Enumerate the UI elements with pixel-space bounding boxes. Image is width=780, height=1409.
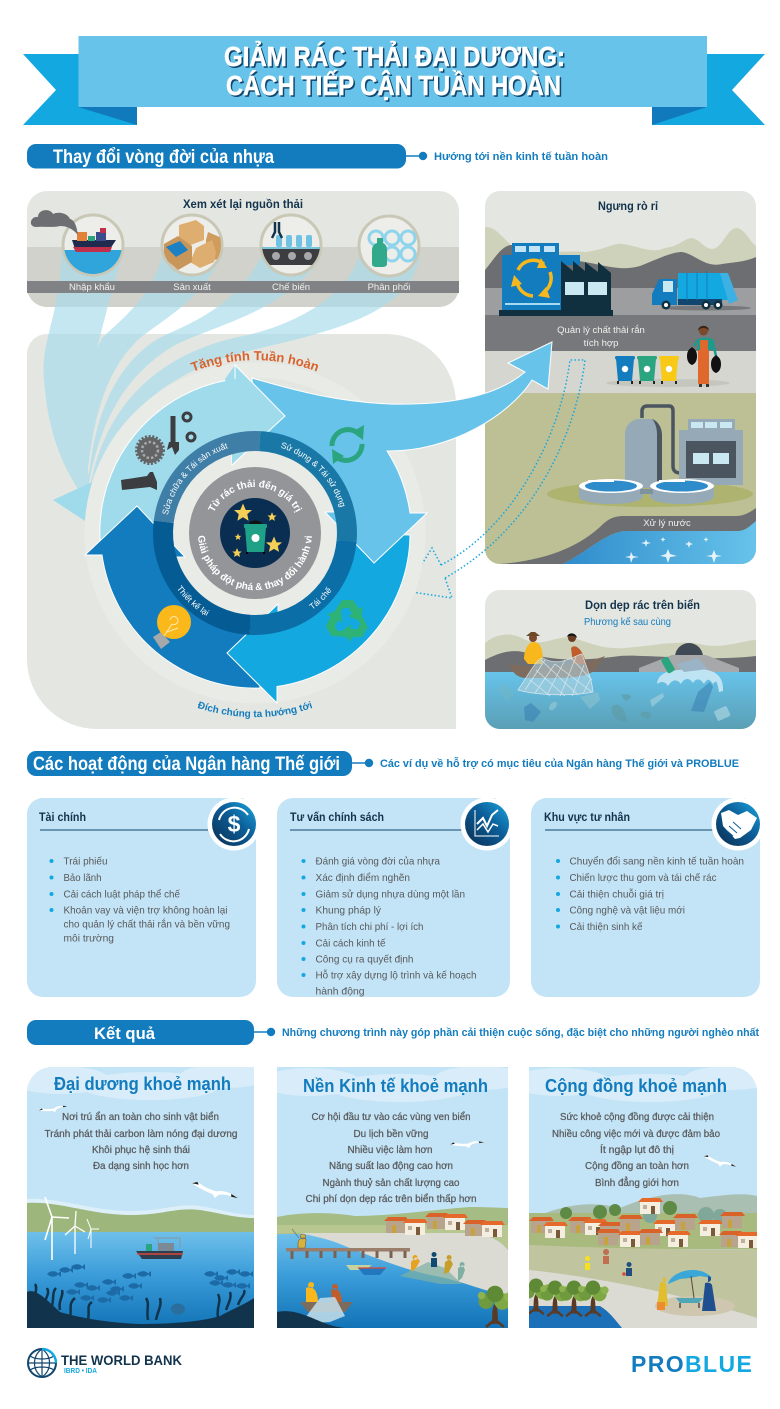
panel: healthy ocean (27, 1067, 254, 1328)
list: policy advice: Hỗ trợ xây dựng lộ trình và kế hoạch (316, 968, 477, 982)
panel: stop leakage (485, 191, 756, 564)
panel: rethink sources background (27, 191, 459, 307)
World Bank logo (28, 1349, 182, 1377)
woman holding trash bags (687, 326, 721, 387)
section header: World Bank activities (27, 751, 739, 776)
logo globe (28, 1349, 56, 1377)
list: finance: môi trường (64, 932, 114, 944)
text: healthy ocean: Khôi phục hệ sinh thái (92, 1144, 190, 1156)
green hill (529, 1213, 757, 1249)
road (529, 1270, 757, 1328)
factory arrow heads (511, 258, 550, 298)
ring label: repair: Sửa chữa & Tái sản xuất (162, 442, 228, 514)
small boats (346, 1265, 386, 1275)
pier (286, 1248, 410, 1259)
list: private sector: Công nghệ và vật liệu mới (570, 904, 685, 916)
beach (300, 1233, 508, 1296)
text: healthy community: Bình đẳng giới hơn (595, 1176, 679, 1189)
village trees (560, 1201, 727, 1223)
icon: chart (460, 796, 514, 850)
section header: plastic life cycle (27, 144, 608, 168)
panel: circularity background (27, 334, 456, 729)
icon: handshake (712, 796, 764, 850)
dotted return arrow (405, 360, 585, 598)
fish school (47, 1264, 253, 1303)
section header: plastic life cycle: Thay đổi vòng đời của nhựa (53, 147, 274, 168)
sea (27, 1232, 254, 1328)
ring segment bottom right (250, 541, 347, 625)
heading: ocean cleanup: Dọn dẹp rác trên biển (585, 600, 700, 612)
light hills (485, 227, 756, 270)
section header: results (27, 1020, 759, 1045)
arrow: recycle (227, 533, 410, 703)
mangrove trees (521, 1278, 609, 1316)
source label: distribution: Phân phối (368, 282, 410, 293)
fishers boat with net (300, 1282, 353, 1323)
section header: results: Kết quả (94, 1024, 156, 1043)
icon: conveyor bottling (260, 215, 322, 275)
list: finance: Cải cách luật pháp thể chế (64, 888, 180, 900)
list: policy advice: Giảm sử dụng nhựa dùng một lần (316, 888, 465, 900)
list: finance: Bảo lãnh (64, 872, 102, 884)
section header: results: Những chương trình này góp phần cải thiện cuộc sống, đặc biệt cho những người nghèo nhất (282, 1027, 759, 1039)
list: finance (50, 856, 230, 944)
gray centre ring (189, 467, 321, 599)
banner left fold (78, 107, 137, 125)
text: healthy economy: Ngành thuỷ sản chất lượng cao (322, 1177, 460, 1189)
playing children (585, 1249, 632, 1276)
field (529, 1245, 757, 1318)
heading rule (40, 829, 208, 831)
road curve with water treatment label (500, 508, 756, 564)
ring segment top right (260, 441, 347, 541)
splash and trash at outfall (657, 656, 723, 692)
seagull (192, 1182, 238, 1198)
label: increasing circularity: Tăng tính Tuần hoàn (190, 350, 318, 372)
heading: stop leakage: Ngưng rò rỉ (598, 201, 658, 213)
list: private sector: Chiến lược thu gom và tái chế rác (570, 872, 716, 884)
fishing boat (136, 1238, 183, 1259)
heading: rethink sources: Xem xét lại nguồn thải (183, 199, 303, 211)
ship smoke (31, 210, 78, 235)
banner main (78, 36, 707, 107)
sea (485, 672, 756, 729)
seagull (704, 1155, 736, 1167)
icon: cargo ship (31, 210, 126, 280)
list: finance: cho quản lý chất thải rắn và bền vững (64, 918, 230, 930)
beach net (400, 1262, 462, 1284)
panel: private sector (531, 796, 764, 997)
heading rule (290, 829, 462, 831)
garbage truck (652, 271, 751, 310)
cleanup hills light (485, 634, 756, 660)
text: healthy ocean: Đa dạng sinh học hơn (93, 1160, 189, 1172)
factory (499, 243, 613, 316)
heading: policy advice: Tư vấn chính sách (290, 810, 384, 824)
list: finance: Trái phiếu (64, 856, 108, 868)
list: finance: Khoản vay và viện trợ không hoàn lại (64, 904, 228, 916)
banner right ribbon tail (705, 54, 765, 125)
PROBLUE logo: PROBLUE (631, 1351, 753, 1377)
net (518, 654, 593, 696)
fishing boat (510, 656, 605, 678)
marine litter (498, 682, 731, 722)
turtle (171, 1304, 185, 1314)
text: healthy economy: Năng suất lao động cao hơn (329, 1160, 453, 1172)
text: healthy economy (306, 1111, 477, 1205)
arrow head edge (232, 365, 285, 465)
icon: cardboard boxes (162, 215, 222, 275)
woman in blue (702, 1276, 716, 1311)
list: private sector: Cải thiện chuỗi giá trị (570, 888, 664, 900)
icon: plastic bottle and rings (359, 216, 419, 276)
flows from source to cycle (44, 250, 420, 495)
icon: green bin (244, 521, 267, 554)
list: policy advice: Phân tích chi phí - lợi ích (316, 921, 424, 933)
water treatment label: Xử lý nước (643, 518, 691, 529)
heading: healthy community: Cộng đồng khoẻ mạnh (545, 1076, 727, 1096)
icon: tools (121, 413, 195, 490)
centre label bottom: Giải pháp đột phá & thay đổi hành vi (198, 536, 312, 590)
source label: production: Sản xuất (173, 282, 211, 293)
text: healthy economy: Cơ hội đầu tư vào các vùng ven biển (312, 1111, 471, 1123)
ring segment top left (164, 441, 260, 522)
list: private sector: Chuyển đổi sang nền kinh tế tuần hoàn (570, 856, 744, 868)
text: healthy ocean (44, 1111, 238, 1172)
text: healthy community: Nhiều công việc mới và được đảm bảo (552, 1128, 720, 1140)
pale band (485, 351, 756, 393)
seagull (450, 1132, 484, 1154)
water and mangroves (529, 1306, 622, 1328)
label: where we are heading: Đích chúng ta hướng tới (198, 701, 312, 719)
arrow: use and reuse with outflow (252, 342, 552, 563)
text: healthy ocean: Nơi trú ẩn an toàn cho sinh vật biển (62, 1111, 219, 1123)
ring label: reuse: Sử dụng & Tái sử dụng (281, 442, 344, 508)
text: healthy ocean: Tránh phát thải carbon làm nóng đại dương (44, 1128, 238, 1140)
outer halo (92, 370, 418, 696)
source label: import: Nhập khẩu (69, 282, 115, 293)
list: private sector: Cải thiện sinh kế (570, 921, 643, 933)
text: healthy economy: Du lịch bền vững (354, 1128, 429, 1140)
hill highlight (27, 1199, 254, 1240)
green hill (27, 1203, 254, 1240)
list: policy advice: Xác định điểm nghẽn (316, 872, 410, 884)
list: policy advice: hành động (316, 986, 365, 998)
title shadow line 1: GIẢM RÁC THẢI ĐẠI DƯƠNG: (226, 42, 566, 74)
logo tagline: IBRD • IDA (64, 1368, 97, 1375)
green land (485, 393, 756, 564)
banner right fold (652, 107, 707, 125)
heading rule (545, 829, 714, 831)
text: healthy economy: Chi phí dọn dẹp rác trên biển thấp hơn (306, 1193, 477, 1205)
icon: currency exchange: $ (228, 811, 241, 837)
seaweed (35, 1284, 244, 1320)
list: policy advice: Khung pháp lý (316, 904, 382, 916)
sea (277, 1234, 508, 1328)
navy centre (220, 498, 290, 568)
arrow head: repair overlay (225, 365, 285, 465)
source label: processing: Chế biến (272, 282, 310, 293)
dark hills (485, 245, 756, 288)
village (529, 1198, 761, 1248)
concrete outfall (639, 643, 739, 672)
section header: World Bank activities: Các hoạt động của Ngân hàng Thế giới (33, 754, 340, 775)
title line 1: GIẢM RÁC THẢI ĐẠI DƯƠNG: (224, 40, 565, 72)
hill (277, 1207, 508, 1250)
water treatment plant (547, 406, 753, 507)
list: policy advice (302, 856, 477, 998)
factory recycle arrows (517, 260, 551, 296)
beach fishers (411, 1252, 465, 1281)
seabed (27, 1291, 254, 1328)
section header: plastic life cycle: Hướng tới nền kinh tế tuần hoàn (434, 151, 608, 163)
recycling bins (606, 356, 730, 387)
panel: policy advice (277, 796, 514, 998)
waste management label: Quản lý chất thải rắn (557, 325, 645, 336)
market stall with umbrella (655, 1270, 735, 1316)
seabed (277, 1311, 350, 1328)
section header: World Bank activities: Các ví dụ về hỗ trợ có mục tiêu của Ngân hàng Thế giới và PROBLUE (380, 757, 739, 770)
subheading: last resort: Phương kế sau cùng (584, 616, 671, 628)
list: policy advice: Công cụ ra quyết định (316, 954, 414, 966)
mangrove (478, 1286, 513, 1327)
wind turbines (45, 1197, 99, 1260)
centre label top: Từ rác thải đến giá trị (208, 480, 302, 513)
fisher with hat (524, 632, 543, 664)
clouds (27, 1067, 254, 1100)
clouds (260, 1066, 525, 1102)
road (485, 288, 756, 315)
icon: reuse arrows (332, 425, 364, 464)
seagull (39, 1098, 67, 1118)
village (384, 1213, 505, 1237)
panel: healthy economy (260, 1066, 525, 1328)
text: healthy community: Ít ngập lụt đô thị (600, 1143, 674, 1156)
text: healthy community: Sức khoẻ cộng đồng được cải thiện (560, 1111, 714, 1123)
cleanup hills dark (485, 651, 756, 672)
circular economy diagram (84, 341, 553, 719)
logo wordmark: THE WORLD BANK (61, 1352, 182, 1368)
heading: healthy economy: Nền Kinh tế khoẻ mạnh (303, 1076, 488, 1096)
ring segment bottom left (163, 522, 250, 625)
icon: light bulb (153, 605, 191, 649)
source label strip (27, 281, 459, 293)
clouds (510, 1066, 775, 1102)
banner right fold shade (652, 107, 707, 125)
panel: healthy community (510, 1066, 775, 1328)
land strip (277, 1225, 508, 1250)
water (563, 521, 756, 564)
orange basket (657, 1302, 665, 1310)
dark band (485, 315, 756, 351)
icon: recycling triangle (321, 600, 372, 645)
sparkles (625, 537, 722, 563)
inner disc (165, 443, 345, 623)
flow arrowhead (53, 482, 92, 523)
ring label: recycle: Tái chế (308, 586, 332, 609)
heading: finance: Tài chính (39, 810, 86, 824)
icon: currency exchange (208, 796, 260, 850)
text: healthy community: Cộng đồng an toàn hơn (585, 1160, 689, 1172)
title banner (23, 36, 765, 125)
arrow: redesign (85, 506, 260, 688)
ring label: redesign: Thiết kế lại (178, 585, 210, 616)
panel: ocean cleanup (485, 590, 756, 729)
distant trees (529, 1194, 757, 1240)
banner left ribbon tail (23, 54, 80, 125)
list: private sector (556, 856, 744, 933)
angler on pier (292, 1229, 306, 1248)
fisher woman (567, 633, 586, 664)
stars (232, 504, 282, 557)
banner left fold shade (78, 107, 137, 125)
text: healthy economy: Nhiều việc làm hơn (348, 1144, 433, 1156)
title line 2: CÁCH TIẾP CẬN TUẦN HOÀN (226, 70, 561, 101)
list: policy advice: Đánh giá vòng đời của nhựa (316, 856, 440, 868)
arrow: repair and remanufacture (100, 365, 285, 540)
heading: private sector: Khu vực tư nhân (544, 810, 630, 824)
list: policy advice: Cải cách kinh tế (316, 938, 386, 950)
text: healthy community (552, 1111, 720, 1189)
panel: finance (27, 796, 260, 997)
waste management label line 2: tích hợp (584, 338, 618, 349)
heading: healthy ocean: Đại dương khoẻ mạnh (54, 1074, 231, 1094)
woman in yellow (657, 1277, 668, 1306)
title shadow line 2: CÁCH TIẾP CẬN TUẦN HOÀN (228, 72, 562, 102)
